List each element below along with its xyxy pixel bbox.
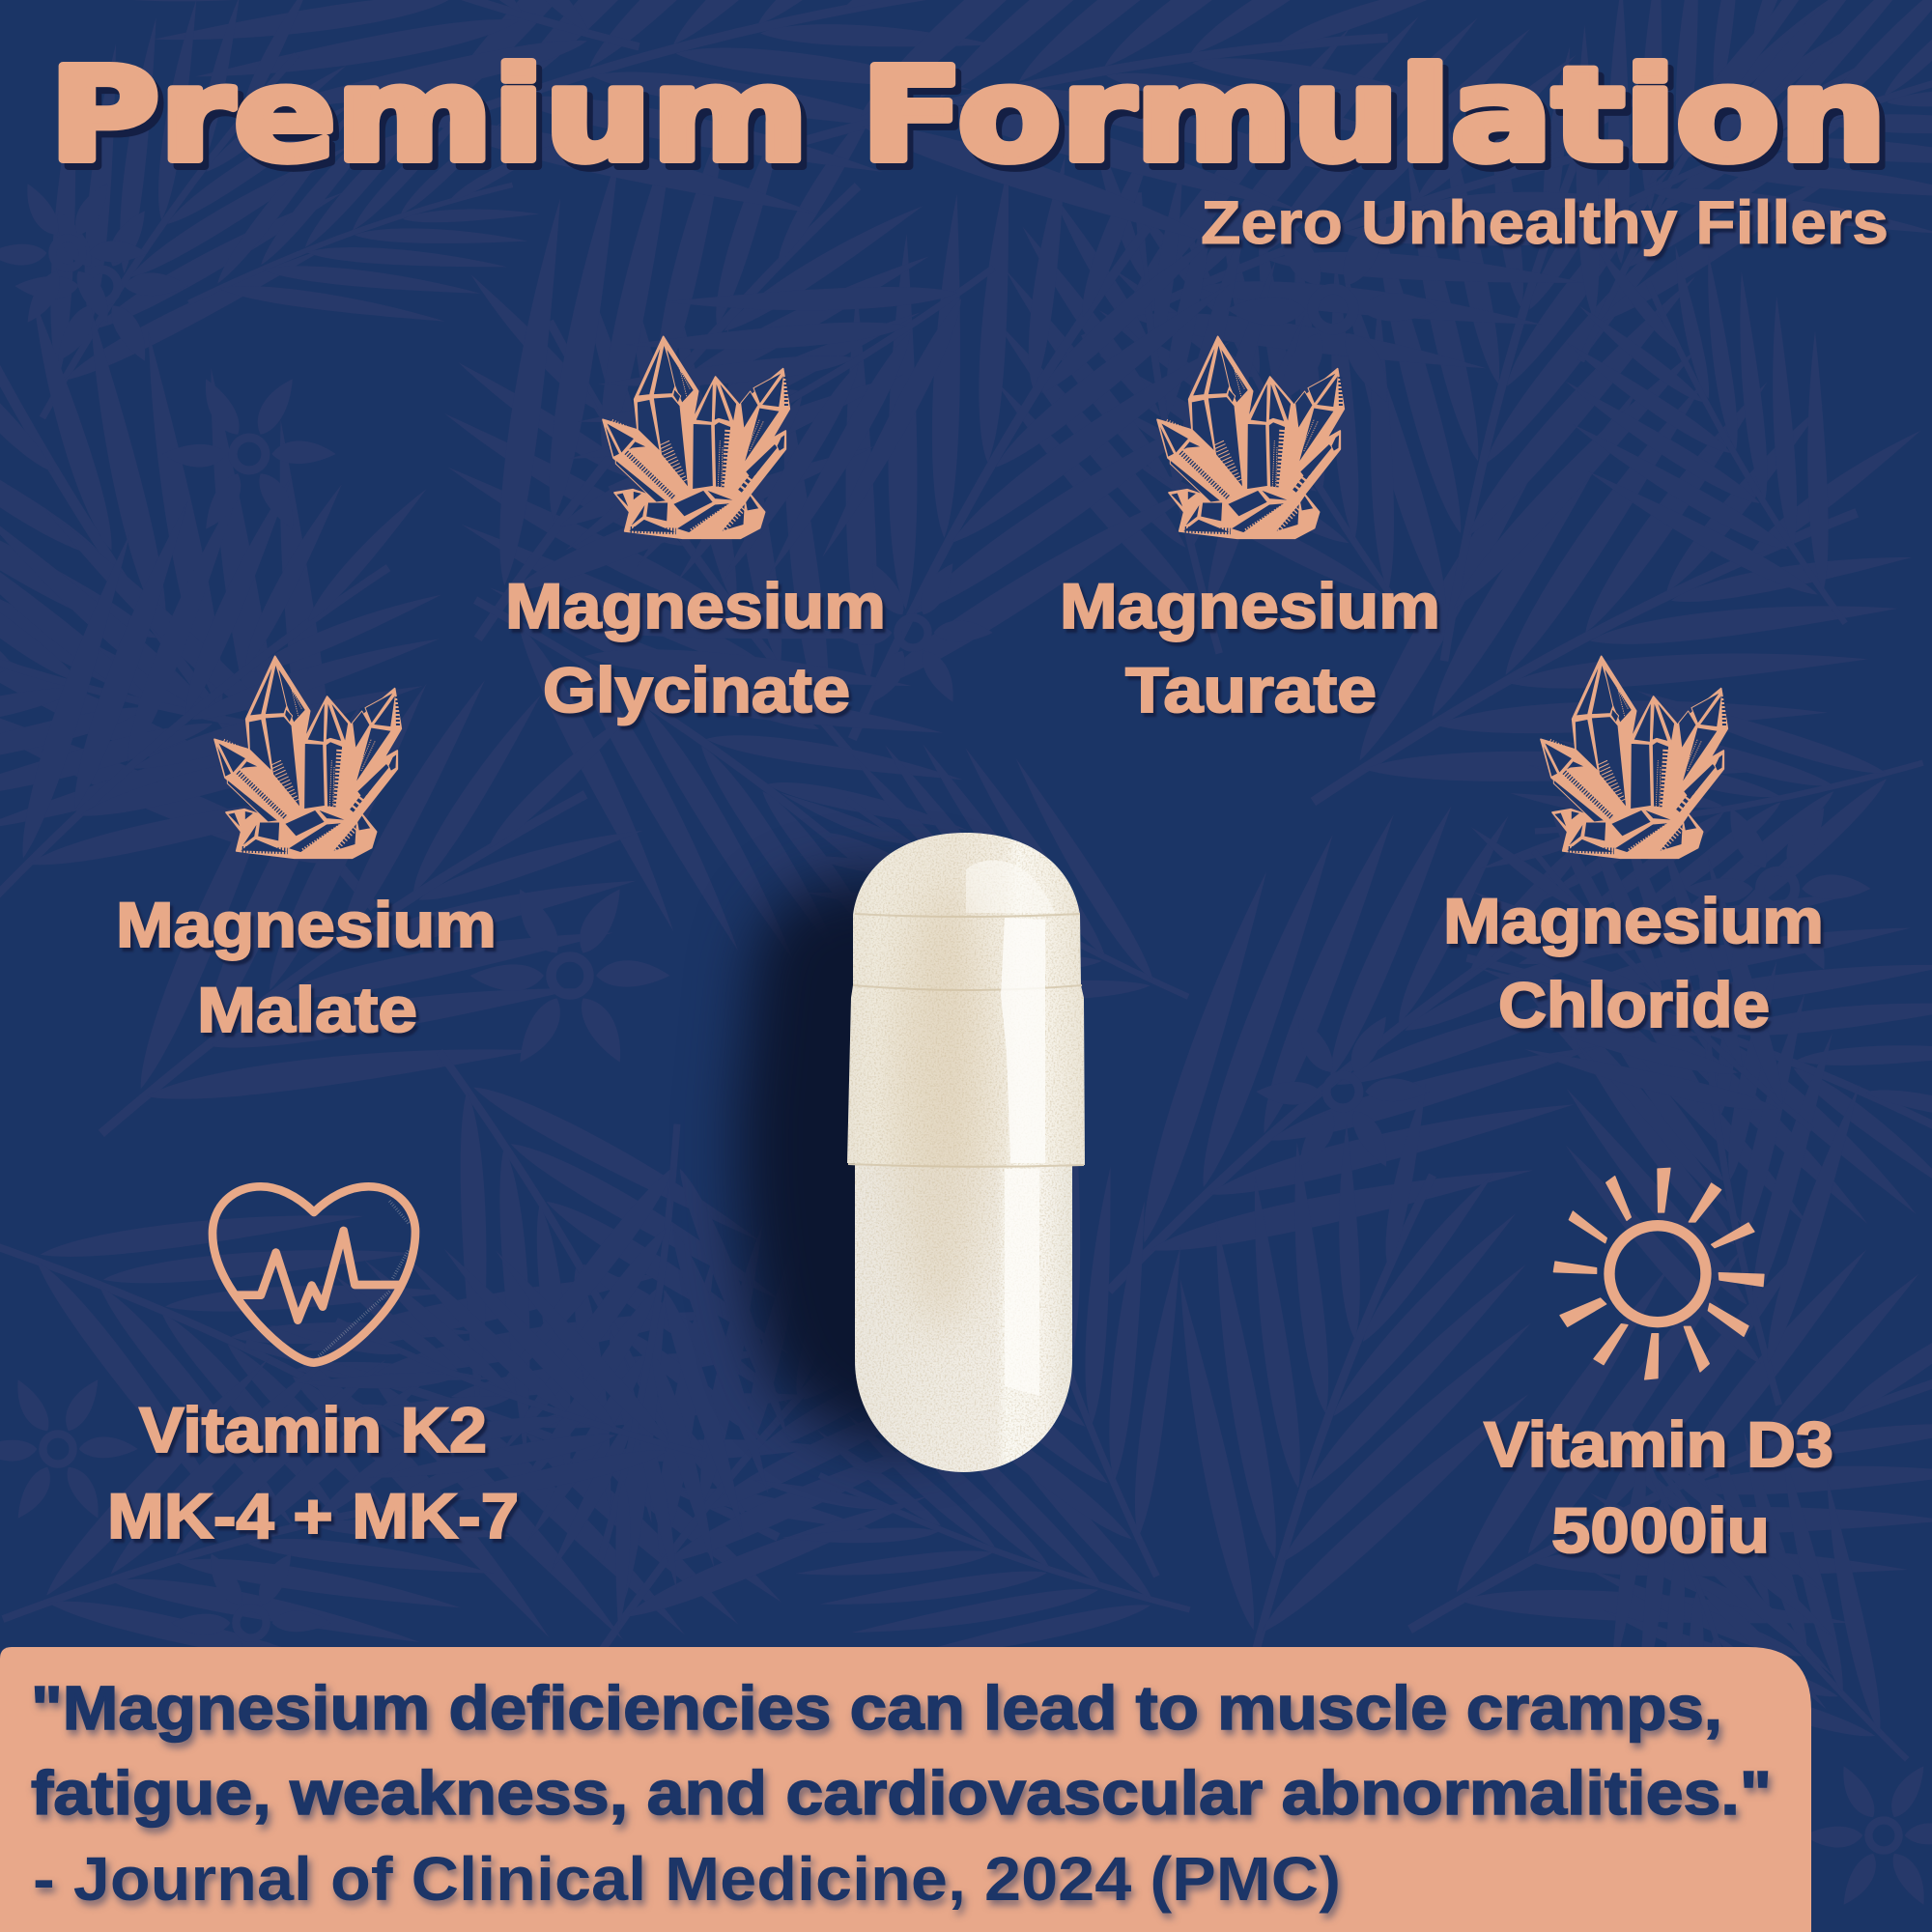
label: Magnesium Chloride: Magnesium (1443, 885, 1824, 956)
label: Magnesium Taurate: Magnesium (1060, 570, 1440, 641)
label: Magnesium Malate: Magnesium (116, 889, 497, 960)
quote background (0, 1647, 1811, 1932)
label: Magnesium Glycinate: Magnesium (505, 570, 886, 641)
label: Vitamin D3: 5000iu (1551, 1494, 1770, 1566)
capsule body (855, 1150, 1072, 1472)
label: Magnesium Taurate: Taurate (1125, 654, 1377, 725)
subtitle: Zero Unhealthy Fillers (1201, 189, 1889, 257)
title: Premium Formulation (55, 48, 1892, 197)
icon: crystal, Magnesium Malate (214, 656, 401, 858)
capsule dome highlight (966, 860, 1055, 913)
title: Premium Formulation (49, 42, 1887, 190)
quote text: fatigue, weakness, and cardiovascular abnormalities." (31, 1758, 1772, 1828)
capsule details (848, 860, 1084, 1396)
icon: crystal, Magnesium Glycinate (603, 336, 789, 538)
label: Vitamin D3: Vitamin D3 (1484, 1408, 1833, 1480)
capsule powder tint (894, 889, 990, 1333)
icon: sun (1553, 1168, 1764, 1379)
label: Vitamin K2: MK-4 + MK-7 (107, 1480, 519, 1551)
label: Magnesium Glycinate (505, 570, 886, 725)
capsule shadow (738, 879, 947, 1443)
label: Magnesium Glycinate: Glycinate (543, 654, 850, 725)
quote text: "Magnesium deficiencies can lead to muscle cramps, (31, 1673, 1722, 1743)
capsule body highlight (1005, 1169, 1039, 1396)
quote text (31, 1673, 1772, 1914)
label: Magnesium Malate: Malate (197, 974, 417, 1045)
capsule cap (847, 833, 1085, 1168)
label: Vitamin D3 (1484, 1408, 1833, 1566)
label: Magnesium Taurate (1060, 570, 1440, 725)
icon: crystal, Magnesium Chloride (1541, 656, 1727, 858)
icon: heart with pulse (213, 1186, 415, 1363)
label: Magnesium Malate (116, 889, 497, 1045)
label: Magnesium Chloride (1443, 885, 1824, 1040)
label: Magnesium Chloride: Chloride (1498, 969, 1770, 1040)
quote text: - Journal of Clinical Medicine, 2024 (PMC) (33, 1844, 1341, 1914)
icon: crystal, Magnesium Taurate (1157, 336, 1344, 538)
capsule seam lines (848, 914, 1084, 1167)
label: Vitamin K2 (107, 1394, 519, 1551)
capsule photo (847, 833, 1085, 1472)
capsule cap highlight (1001, 918, 1045, 1163)
panel: quote (0, 1647, 1811, 1932)
label: Vitamin K2: Vitamin K2 (139, 1394, 487, 1465)
